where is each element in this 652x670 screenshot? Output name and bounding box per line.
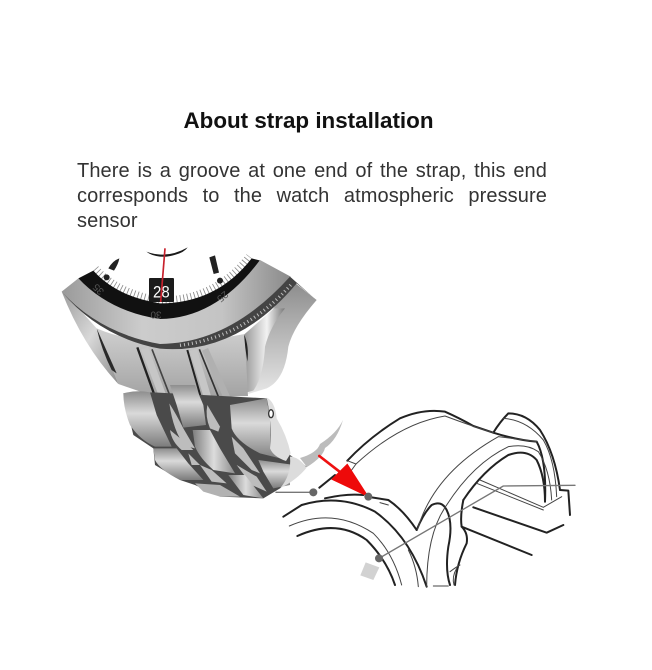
strap outline thick strokes [283, 411, 570, 587]
knurled bezel edge [62, 277, 313, 349]
case body [97, 328, 248, 398]
pin hole [269, 410, 273, 418]
grey square marker [360, 562, 379, 580]
weave strips [169, 403, 267, 492]
bottom link [195, 483, 240, 497]
leader line left [276, 490, 313, 494]
end link face [267, 398, 291, 461]
left lug [62, 292, 118, 384]
date window: 28 [153, 282, 170, 301]
end cap [280, 457, 307, 488]
lug shadow lines [97, 328, 117, 373]
lower left link [153, 448, 203, 480]
dark gap silhouette [123, 392, 307, 498]
red arrow [319, 456, 368, 497]
lower strip links [228, 475, 263, 498]
callout dots [309, 488, 383, 562]
lower right link [258, 460, 290, 488]
bezel numerals [91, 281, 230, 319]
bezel numerals: 25 [214, 288, 230, 304]
bezel [62, 260, 291, 344]
photo: woven bracelet links [123, 385, 307, 498]
link grooves [137, 347, 228, 401]
title: About strap installation [183, 108, 434, 133]
bezel numerals: 35 [91, 281, 107, 297]
right link [230, 398, 287, 460]
strap outline thin strokes [289, 416, 562, 587]
left link [123, 391, 172, 447]
line drawing: lug groove diagram [276, 411, 575, 587]
text block: installation instructions: There is a groove at one end of the strap, this end [77, 160, 547, 182]
photo: steel watch case and bezel [62, 247, 317, 401]
right lug outer [248, 282, 317, 394]
red seconds hand [161, 248, 165, 302]
center column link [170, 385, 206, 428]
dial ticks [93, 258, 252, 303]
text block: installation instructions: corresponds to the watch atmospheric pressure [77, 185, 547, 207]
center lower link [193, 430, 235, 473]
photo: strap tip [300, 420, 343, 467]
black date-side marker [146, 247, 188, 257]
text block: installation instructions [77, 160, 547, 232]
hour markers [104, 255, 223, 284]
text block: installation instructions: sensor [77, 210, 138, 232]
bezel numerals: 30 [150, 308, 162, 319]
black chapter ring [78, 258, 261, 320]
leader line to sensor [379, 485, 575, 558]
date window [149, 278, 174, 302]
right lug highlight strip [245, 308, 285, 392]
